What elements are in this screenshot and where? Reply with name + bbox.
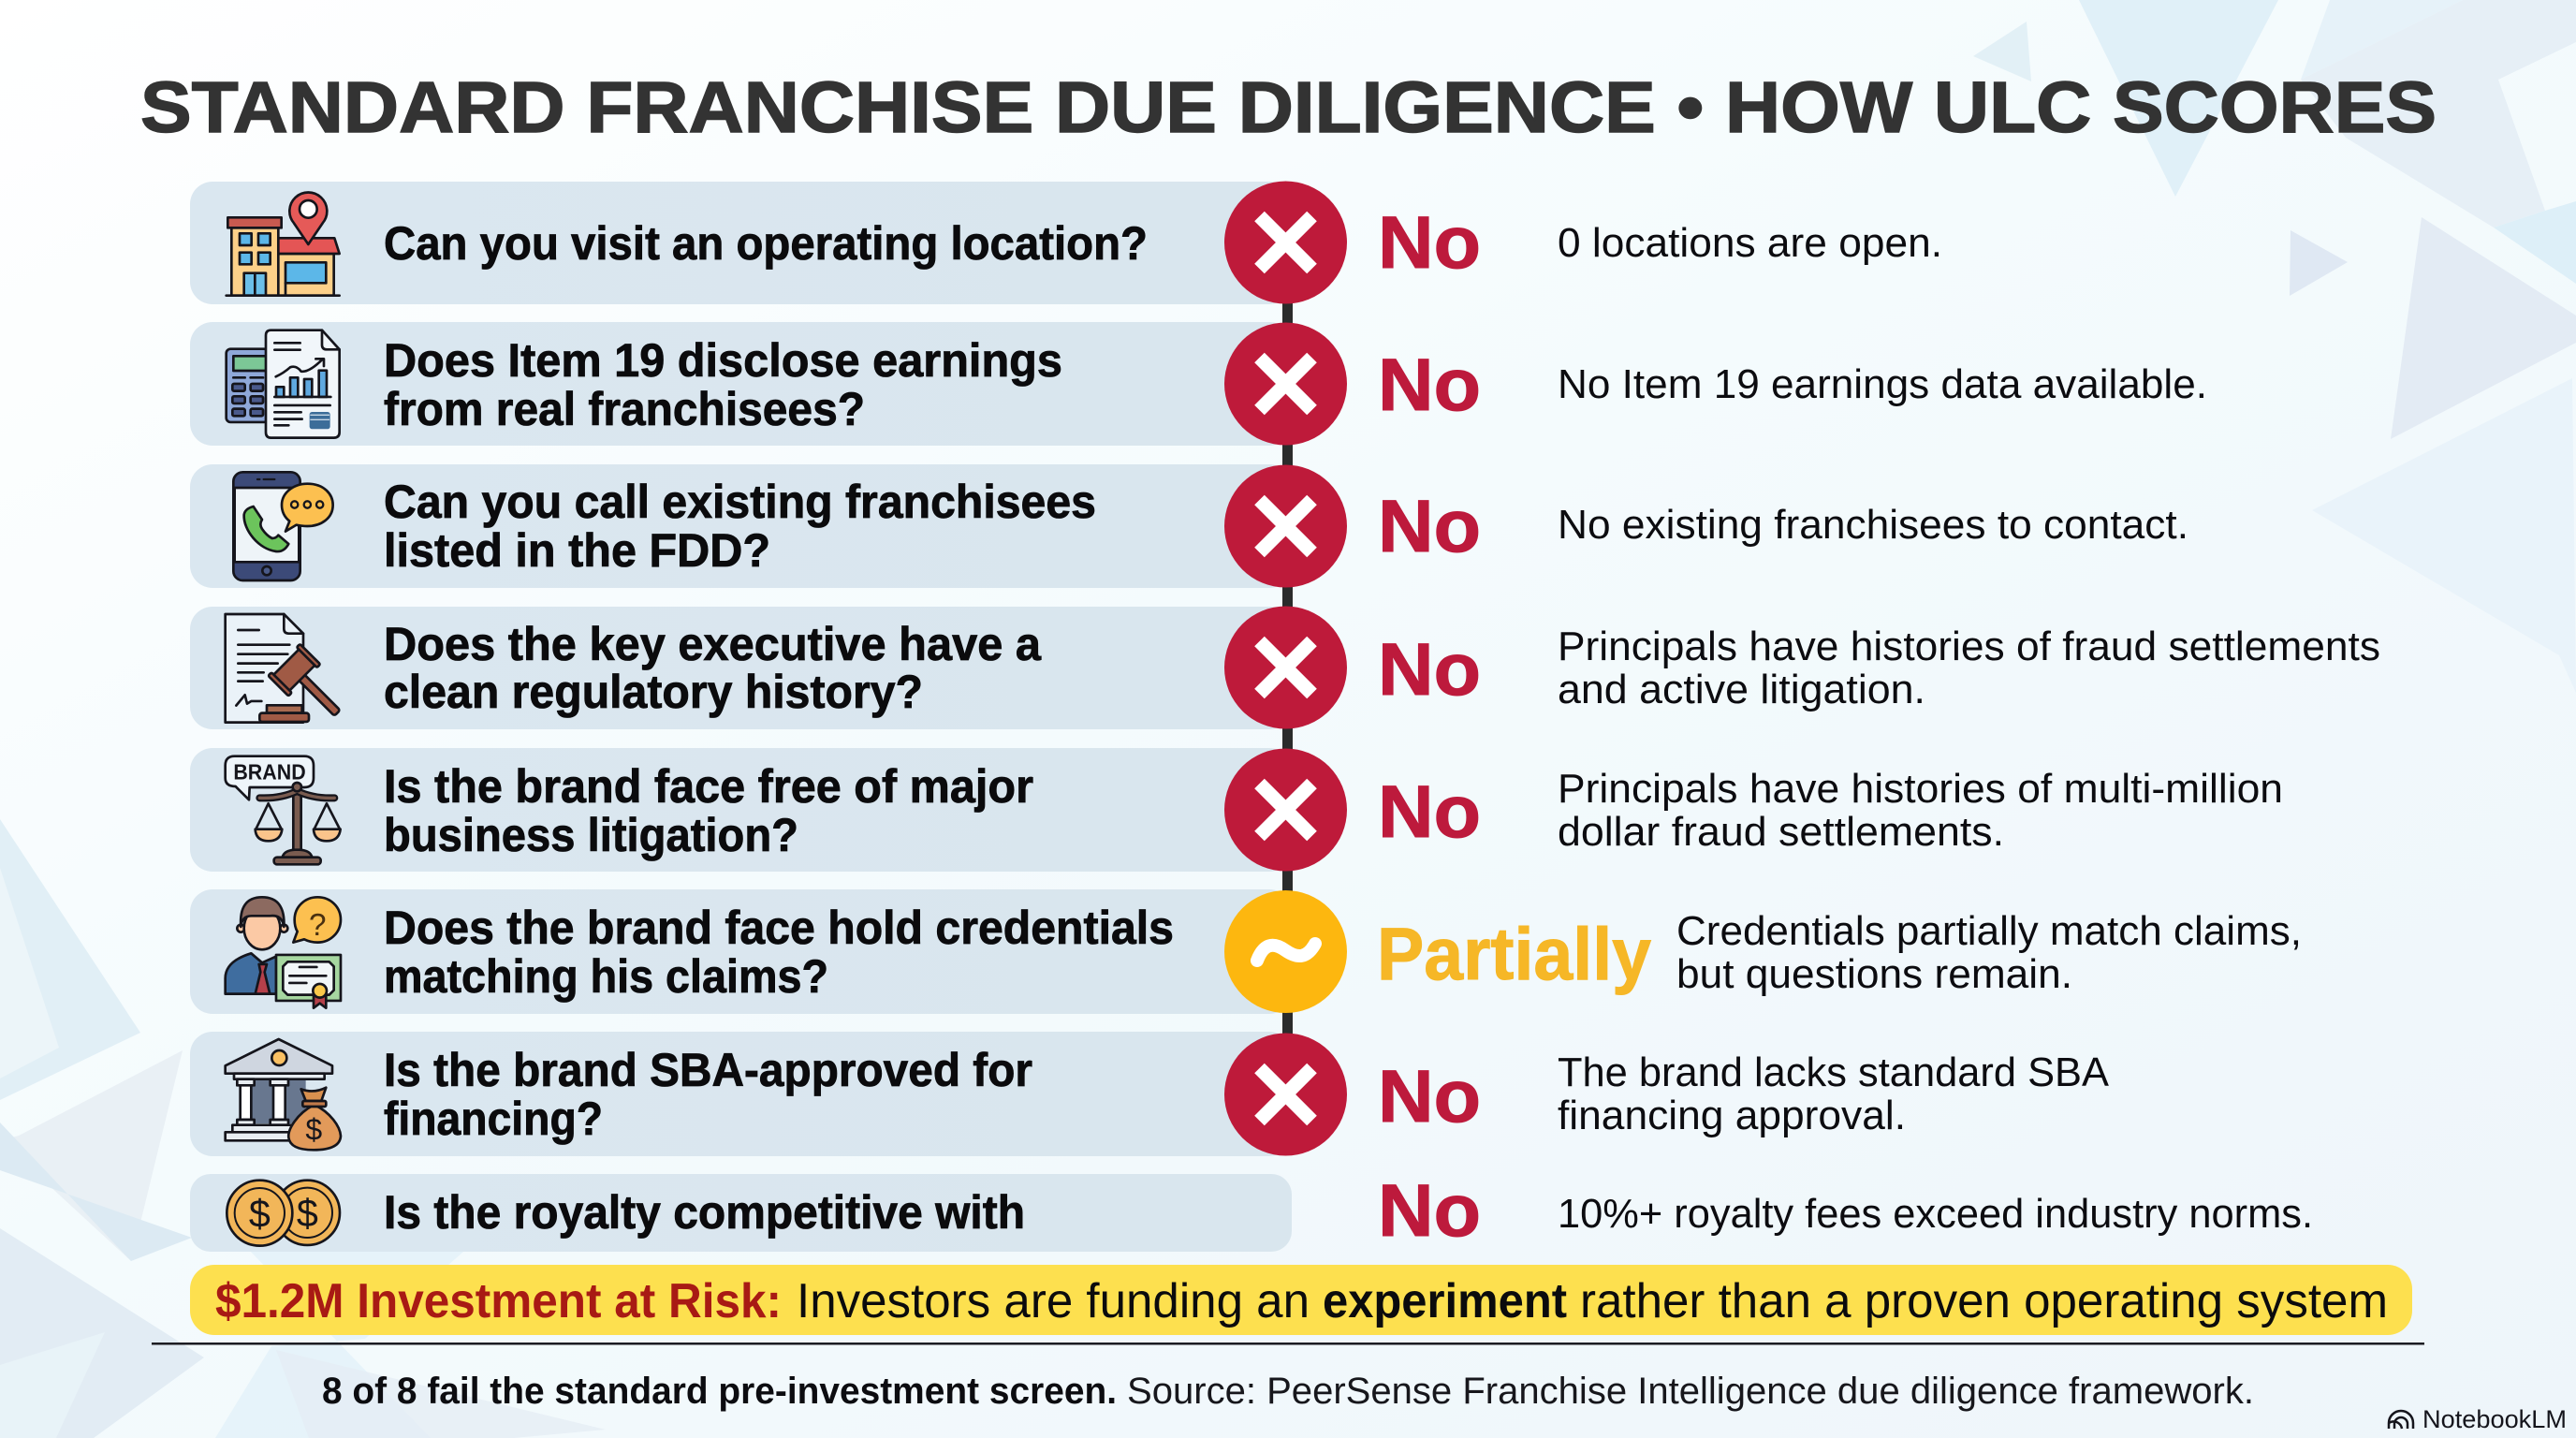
- icon: two gold coins: [227, 1181, 340, 1246]
- status label: No: [1378, 627, 1481, 711]
- icon: bank with money bag: [226, 1039, 341, 1150]
- question text: Is the royalty competitive with: [384, 1186, 1025, 1239]
- question text: Can you visit an operating location?: [384, 217, 1148, 270]
- answer text: Credentials partially match claims,: [1676, 908, 2302, 954]
- answer text: [1558, 624, 2380, 712]
- NotebookLM watermark: [2389, 1405, 2567, 1433]
- icon: document and gavel: [226, 614, 353, 729]
- callout body start: Investors are funding an: [797, 1274, 1310, 1328]
- footer source: Source: PeerSense Franchise Intelligence due diligence framework.: [1127, 1371, 2254, 1412]
- question text: Does the key executive have a: [384, 618, 1042, 670]
- question text: matching his claims?: [384, 950, 828, 1003]
- question text: [384, 476, 1096, 577]
- status label: No: [1378, 484, 1481, 567]
- panel: row 3 call franchisees: [190, 464, 2188, 588]
- question text: Can you call existing franchisees: [384, 476, 1096, 528]
- question text: Does the brand face hold credentials: [384, 902, 1174, 954]
- question text: clean regulatory history?: [384, 666, 923, 718]
- answer text: 0 locations are open.: [1558, 220, 1942, 266]
- status label: Partially: [1377, 912, 1651, 995]
- panel: row 5 brand face litigation: [190, 748, 2283, 872]
- question text: [384, 760, 1033, 861]
- panel: row 4 regulatory history: [190, 607, 2380, 729]
- question text: Is the brand face free of major: [384, 760, 1033, 813]
- status circle: no: [1224, 749, 1347, 871]
- question text: [384, 902, 1174, 1003]
- callout red lead: $1.2M Investment at Risk:: [215, 1274, 782, 1328]
- answer text: Principals have histories of multi-million: [1558, 766, 2283, 812]
- status circle: partially: [1224, 890, 1347, 1013]
- icon: calculator and report: [227, 330, 340, 438]
- icon: two gold coins: $: [249, 1192, 271, 1235]
- callout body end: rather than a proven operating system: [1580, 1274, 2388, 1328]
- question text: Does Item 19 disclose earnings: [384, 334, 1062, 387]
- answer text: [1558, 1049, 2110, 1138]
- answer text: The brand lacks standard SBA: [1558, 1049, 2110, 1095]
- question text: from real franchisees?: [384, 383, 865, 435]
- icon: building with map pin: [227, 192, 340, 296]
- callout bold word: experiment: [1323, 1274, 1567, 1328]
- panel: row 2 item 19 earnings: [190, 322, 2207, 446]
- status circle: no: [1224, 607, 1347, 728]
- icon: brand bubble and scales: [226, 756, 341, 864]
- answer text: No Item 19 earnings data available.: [1558, 361, 2207, 407]
- panel: row 1 visit location: [190, 182, 1942, 304]
- icon: bank with money bag: $: [305, 1112, 322, 1146]
- answer text: No existing franchisees to contact.: [1558, 502, 2188, 548]
- answer text: [1558, 766, 2283, 855]
- connector line between status circles: [1282, 300, 1293, 1039]
- question text: Is the brand SBA-approved for: [384, 1044, 1032, 1096]
- row background: [190, 748, 1292, 872]
- callout: investment at risk: [190, 1265, 2412, 1335]
- question text: business litigation?: [384, 809, 798, 861]
- status label: No: [1378, 343, 1481, 426]
- footer source note: [322, 1371, 2254, 1412]
- status circle: no: [1224, 1034, 1347, 1155]
- row background: [190, 464, 1292, 588]
- question text: listed in the FDD?: [384, 524, 770, 577]
- answer text: 10%+ royalty fees exceed industry norms.: [1558, 1191, 2313, 1237]
- status label: No: [1378, 200, 1481, 284]
- status circle: no: [1224, 322, 1347, 446]
- row background: [190, 607, 1292, 729]
- answer text: financing approval.: [1558, 1093, 1906, 1138]
- question text: [384, 618, 1042, 718]
- icon: notebook arcs: [2389, 1411, 2413, 1429]
- panel: row 7 SBA approval: [190, 1032, 2110, 1156]
- footer bold statement: 8 of 8 fail the standard pre-investment screen.: [322, 1371, 1117, 1412]
- icon: two gold coins: $: [297, 1192, 318, 1235]
- icon: person with question and certificate: ?: [309, 908, 327, 943]
- status label: No: [1378, 1054, 1481, 1137]
- answer text: [1676, 908, 2302, 997]
- answer text: but questions remain.: [1676, 951, 2072, 997]
- panel: row 6 credentials: [190, 889, 2302, 1014]
- question text: [384, 334, 1062, 435]
- status circle: no: [1224, 182, 1347, 303]
- panel: row 8 royalty: [190, 1168, 2313, 1252]
- question text: financing?: [384, 1093, 603, 1145]
- icon: person with question and certificate: [226, 897, 341, 1008]
- icon: phone with speech bubble: [233, 472, 333, 580]
- watermark text: NotebookLM: [2422, 1405, 2567, 1433]
- answer text: Principals have histories of fraud settlements: [1558, 624, 2380, 669]
- status label: No: [1378, 1168, 1481, 1252]
- row background: [190, 1032, 1292, 1156]
- callout background: [190, 1265, 2412, 1335]
- question text: [384, 1044, 1032, 1145]
- title: STANDARD FRANCHISE DUE DILIGENCE • HOW ULC SCORES: [140, 67, 2437, 148]
- row background: [190, 1174, 1292, 1252]
- icon: brand bubble and scales: BRAND: [233, 759, 306, 784]
- status circle: no: [1224, 464, 1347, 588]
- row background: [190, 322, 1292, 446]
- answer text: dollar fraud settlements.: [1558, 809, 2004, 855]
- row background: [190, 889, 1292, 1014]
- row background: [190, 182, 1292, 304]
- status label: No: [1378, 770, 1481, 853]
- answer text: and active litigation.: [1558, 667, 1925, 712]
